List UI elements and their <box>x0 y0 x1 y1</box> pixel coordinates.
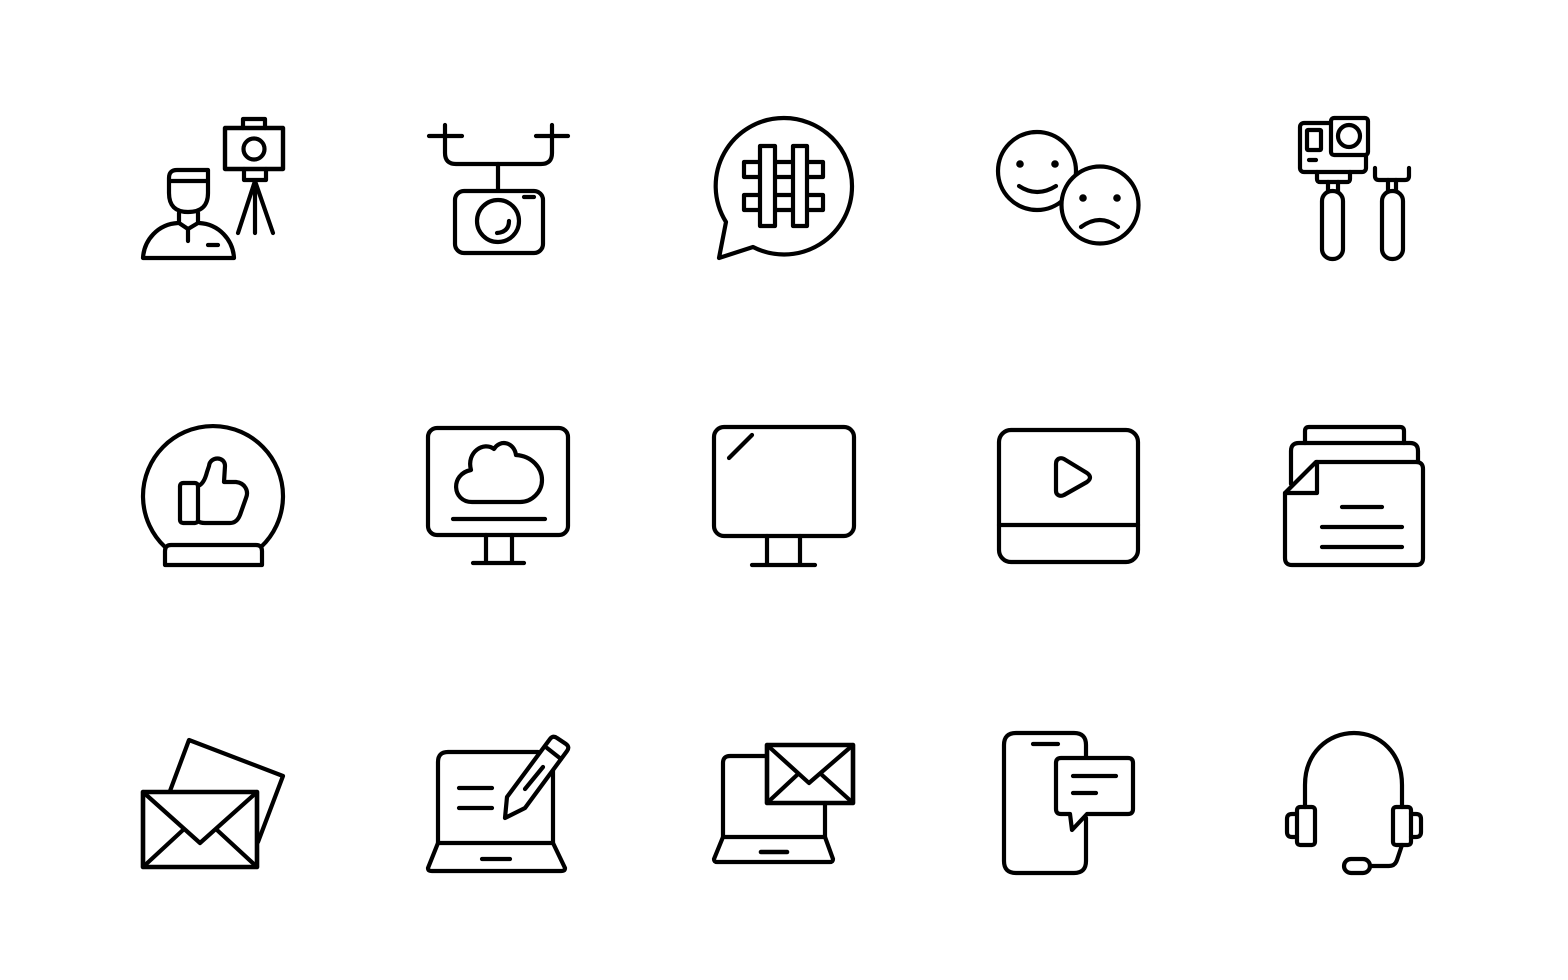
icon: person with camera on tripod <box>143 119 283 258</box>
icon: laptop with envelope <box>714 745 853 862</box>
icon: action camera on selfie stick <box>1300 118 1409 259</box>
icon: speech bubble with railway track <box>716 118 852 258</box>
icon: blank monitor <box>714 427 854 565</box>
icon: folder with documents <box>1285 427 1423 565</box>
icon: thumbs up in glass dome <box>143 426 283 565</box>
icon: video player <box>999 430 1138 562</box>
icon: laptop with pencil <box>428 737 568 871</box>
icon: monitor with cloud <box>428 428 568 563</box>
icon: drone camera <box>429 125 568 253</box>
icon: happy and sad faces <box>998 132 1138 244</box>
icon: envelope with letter <box>143 740 283 867</box>
icon: headset with microphone <box>1287 733 1421 873</box>
icon: phone with chat bubble <box>1004 733 1133 873</box>
